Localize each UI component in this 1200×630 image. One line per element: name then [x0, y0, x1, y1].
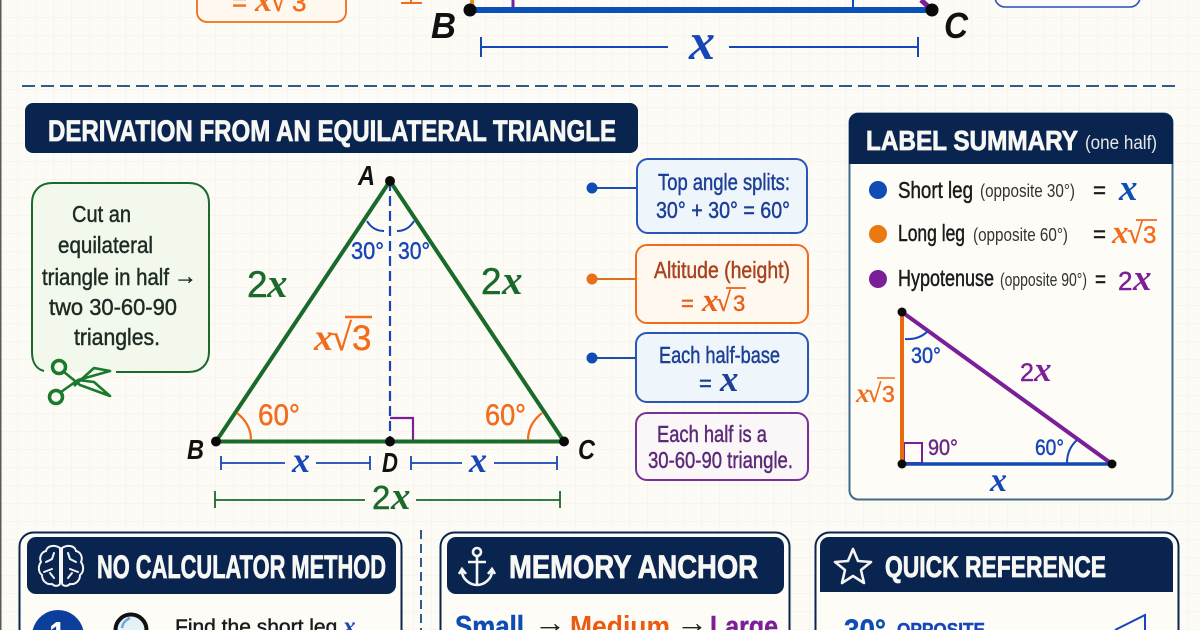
angle labels: 30°	[351, 238, 384, 265]
panel: no calculator method	[20, 532, 402, 630]
equilateral triangle diagram	[187, 160, 596, 518]
side labels: 2	[247, 264, 268, 305]
half-base dimensions	[221, 456, 557, 470]
icon: small triangle	[1115, 615, 1145, 630]
row: short leg: =	[1093, 177, 1106, 203]
row: short leg: x	[1118, 168, 1138, 209]
callout: altitude: x	[701, 283, 718, 319]
row: long leg: x	[1111, 215, 1128, 251]
altitude label: x	[313, 317, 333, 359]
30-60-90 triangle diagram: 90°	[928, 435, 958, 460]
30-60-90 triangle diagram: 30°	[911, 343, 941, 368]
heading: label summary: (one half)	[1085, 133, 1157, 154]
callout: top angle splits: Top angle splits:	[658, 169, 790, 195]
30-60-90 triangle diagram: √	[867, 379, 882, 408]
callout: each half: Each half is a	[657, 421, 767, 447]
row: hypotenuse: Hypotenuse	[898, 265, 994, 291]
equilateral triangle diagram: x	[501, 257, 522, 303]
callout: cut an equilateral triangle: triangles.	[74, 324, 160, 350]
angle labels: 30°	[398, 238, 430, 265]
icon: anchor	[459, 548, 495, 585]
icon: scissors	[50, 360, 110, 404]
equilateral triangle diagram: 2	[372, 479, 390, 516]
equilateral triangle diagram: x	[291, 440, 310, 480]
vertex labels: A	[357, 160, 375, 191]
callout: altitude: =	[681, 291, 694, 316]
heading: no calculator method: NO CALCULATOR METHOD	[97, 549, 386, 585]
callout: altitude	[586, 245, 808, 323]
top blue callout (cropped)	[995, 0, 1140, 7]
heading: label summary	[849, 113, 1173, 164]
heading: memory anchor: MEMORY ANCHOR	[509, 549, 758, 585]
row: hypotenuse: =	[1095, 266, 1106, 292]
heading: quick reference: QUICK REFERENCE	[885, 551, 1106, 584]
altitude label: √	[331, 317, 352, 359]
callout: half-base	[586, 333, 808, 402]
row: hypotenuse	[869, 258, 1152, 299]
top triangle base (cropped): C	[944, 5, 969, 46]
right angle marker	[390, 418, 413, 441]
callout: top angle splits: 30° + 30° = 60°	[656, 197, 790, 223]
altitude label: 3	[352, 319, 371, 358]
top base dimension x: x	[688, 14, 715, 71]
30-60-90 triangle diagram: x	[1033, 350, 1052, 389]
panel: memory anchor	[440, 532, 790, 630]
angle labels: 60°	[258, 399, 300, 432]
altitude dashed	[389, 181, 391, 441]
equilateral triangle diagram: 2	[481, 261, 502, 302]
triangle outline	[216, 181, 564, 442]
row: short leg: (opposite 30°)	[980, 181, 1075, 201]
full base dimension	[215, 491, 560, 508]
30-60-90 triangle diagram: x	[989, 462, 1007, 499]
callout: cut an equilateral triangle: Cut an	[72, 201, 131, 227]
callout: cut an equilateral triangle: equilateral	[58, 232, 153, 258]
callout: each half	[636, 413, 808, 480]
section heading: derivation	[25, 103, 638, 153]
row: hypotenuse: 2	[1118, 266, 1132, 296]
30-60-90 triangle diagram: 3	[882, 381, 895, 407]
row: long leg: =	[1093, 221, 1106, 247]
30-60-90 triangle diagram	[855, 308, 1116, 499]
callout: cut an equilateral triangle: two 30-60-90	[49, 294, 177, 320]
panel: label summary	[849, 113, 1173, 500]
icon: brain	[39, 546, 83, 586]
row: 30 degrees opposite	[844, 614, 985, 630]
row: long leg: √	[1127, 218, 1143, 250]
icon: star	[835, 549, 871, 583]
row: long leg	[869, 215, 1157, 251]
30-60-90 triangle diagram: 2	[1020, 359, 1034, 387]
section heading: derivation: DERIVATION FROM AN EQUILATERAL TRIANGLE	[48, 115, 616, 148]
top base dimension x	[481, 14, 918, 71]
callout: altitude: 3	[733, 291, 745, 316]
callout: altitude: Altitude (height)	[654, 257, 790, 283]
angle labels	[258, 238, 526, 432]
30-60-90 triangle diagram: 60°	[1035, 435, 1064, 460]
row: long leg: Long leg	[898, 220, 965, 246]
row: long leg: 3	[1143, 222, 1156, 249]
callout: top angle splits	[586, 159, 807, 233]
side labels: x	[266, 260, 288, 306]
callout: cut an equilateral triangle: →	[174, 263, 197, 289]
vertex labels: D	[382, 447, 398, 478]
callout: cut an equilateral triangle: triangle in half	[42, 264, 170, 290]
row: hypotenuse: (opposite 90°)	[1000, 270, 1087, 290]
panel: quick reference	[816, 532, 1178, 630]
callout: each half: 30-60-90 triangle.	[648, 447, 793, 473]
heading: label summary: LABEL SUMMARY	[866, 125, 1078, 156]
callout: cut an equilateral triangle	[32, 183, 209, 404]
angle arcs	[367, 221, 414, 231]
row: short leg	[869, 168, 1138, 209]
top triangle base (cropped): B	[431, 5, 456, 46]
callout: altitude: √	[716, 287, 731, 317]
equilateral triangle diagram: x	[468, 440, 487, 480]
icon: magnifier	[116, 614, 146, 630]
row: short leg: Short leg	[898, 177, 973, 203]
callout: half-base: x	[719, 359, 738, 400]
vertices	[211, 176, 569, 446]
angle labels: 60°	[485, 399, 526, 432]
callout: half-base: =	[699, 371, 712, 396]
vertex labels: C	[578, 434, 596, 465]
equilateral triangle diagram: x	[390, 475, 410, 518]
altitude label	[313, 317, 372, 359]
top triangle base (cropped)	[401, 0, 969, 46]
vertex labels	[187, 160, 596, 478]
row: long leg: (opposite 60°)	[973, 225, 1068, 245]
small medium large sequence	[455, 604, 778, 630]
vertex labels: B	[187, 434, 204, 465]
30-60-90 triangle diagram: x	[855, 378, 870, 408]
step 1 badge	[33, 610, 83, 630]
top orange callout (cropped)	[197, 0, 346, 22]
row: hypotenuse: x	[1132, 258, 1152, 299]
callout: half-base: Each half-base	[659, 342, 780, 368]
